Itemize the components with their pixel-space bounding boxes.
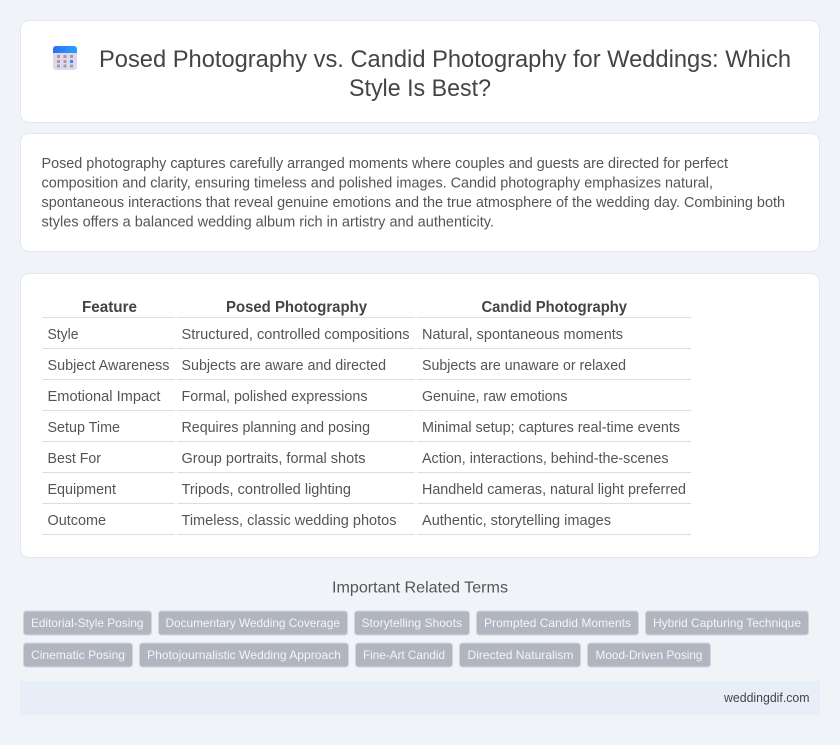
tag: prompted candid moments [476, 611, 638, 635]
text block: introduction [42, 156, 785, 230]
tag: storytelling shoots [354, 611, 470, 635]
tag: cinematic posing [24, 643, 132, 667]
table row: style [42, 327, 691, 349]
table row: setup time: Setup Time [48, 420, 120, 436]
table row: equipment: Equipment [48, 482, 116, 498]
table row: best for: Best For [48, 451, 101, 467]
footer [20, 681, 820, 715]
table row: subject awareness [42, 358, 691, 380]
table header row [42, 299, 691, 318]
tag: hybrid capturing technique: Hybrid Capturing Technique [653, 616, 801, 630]
table row: style: Structured, controlled compositions [182, 327, 410, 343]
text block: introduction: spontaneous interactions that reveal genuine emotions and the true atmosphere of the wedding day. Combining both [42, 195, 785, 211]
tag: documentary wedding coverage: Documentary Wedding Coverage [166, 616, 340, 630]
tag: editorial-style posing [24, 611, 152, 635]
panel: comparison table [20, 274, 820, 558]
tag: photojournalistic wedding approach [140, 643, 348, 667]
table row: emotional impact: Formal, polished expressions [182, 389, 368, 405]
table row: best for [42, 451, 691, 473]
table row: equipment [42, 482, 691, 504]
footer: weddingdif.com [723, 690, 810, 705]
tag: prompted candid moments: Prompted Candid Moments [484, 616, 631, 630]
table row: outcome: Outcome [48, 513, 106, 529]
table row: equipment: Tripods, controlled lighting [182, 482, 351, 498]
table row: style: Natural, spontaneous moments [422, 327, 623, 343]
table row: best for: Action, interactions, behind-the-scenes [422, 451, 668, 467]
tag: storytelling shoots: Storytelling Shoots [362, 616, 462, 630]
tag: documentary wedding coverage [158, 611, 348, 635]
tag: cinematic posing: Cinematic Posing [31, 648, 125, 662]
text block: introduction: styles offers a balanced wedding album rich in artistry and authenticity. [42, 214, 494, 230]
table row: emotional impact: Genuine, raw emotions [422, 389, 568, 405]
title: Posed Photography vs. Candid Photography for Weddings: Which [99, 46, 791, 73]
panel: header [20, 20, 820, 122]
table row: outcome: Authentic, storytelling images [422, 513, 611, 529]
tag: directed naturalism: Directed Naturalism [468, 648, 574, 662]
tag: fine-art candid: Fine-Art Candid [363, 648, 445, 662]
tag: photojournalistic wedding approach: Photojournalistic Wedding Approach [147, 648, 341, 662]
table header row: Candid Photography [482, 299, 627, 316]
title: Style Is Best? [349, 75, 491, 102]
table row: best for: Group portraits, formal shots [182, 451, 366, 467]
tag: hybrid capturing technique [646, 611, 808, 635]
tag: mood-driven posing: Mood-Driven Posing [596, 648, 702, 662]
tag: editorial-style posing: Editorial-Style Posing [31, 616, 144, 630]
table row: emotional impact: Emotional Impact [48, 389, 160, 405]
table row: setup time: Requires planning and posing [182, 420, 370, 436]
table row: outcome [42, 513, 691, 535]
table row: outcome: Timeless, classic wedding photos [182, 513, 396, 529]
related term tags [24, 611, 808, 667]
table row: subject awareness: Subject Awareness [48, 358, 170, 374]
table row: subject awareness: Subjects are unaware or relaxed [422, 358, 626, 374]
tag: fine-art candid [356, 643, 452, 667]
icon: calendar [53, 46, 77, 70]
title [99, 46, 791, 102]
table row: setup time [42, 420, 691, 442]
table row: style: Style [48, 327, 78, 343]
table row: setup time: Minimal setup; captures real-time events [422, 420, 680, 436]
tag: directed naturalism [460, 643, 580, 667]
table header row: Posed Photography [226, 299, 367, 316]
text block: introduction: composition and clarity, ensuring timeless and polished images. Candid photography emphasizes natural, [42, 176, 713, 192]
table row: subject awareness: Subjects are aware and directed [182, 358, 386, 374]
table row: emotional impact [42, 389, 691, 411]
table header row: Feature [82, 299, 137, 316]
panel: introduction [20, 134, 820, 252]
text block: introduction: Posed photography captures carefully arranged moments where couples and guests are directed for perfect [42, 156, 728, 172]
heading: important related terms: Important Related Terms [332, 580, 508, 596]
tag: mood-driven posing [588, 643, 710, 667]
table row: equipment: Handheld cameras, natural light preferred [422, 482, 686, 498]
